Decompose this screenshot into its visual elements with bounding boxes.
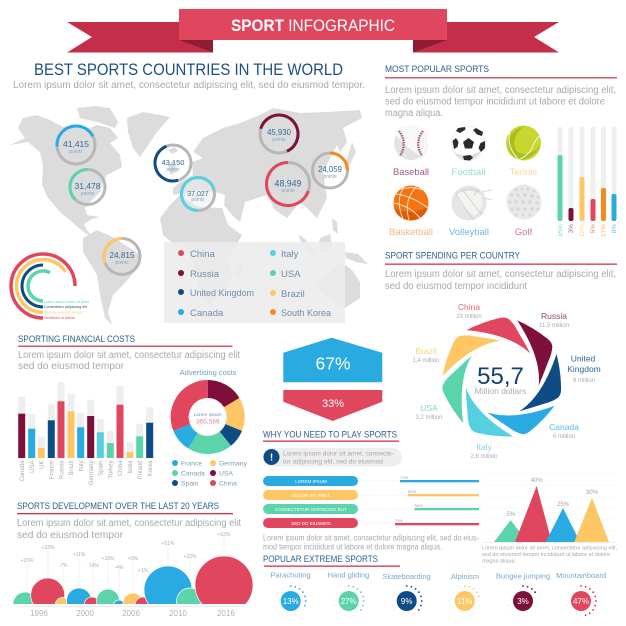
pinwheel chart: spending: 55,7: [477, 363, 524, 390]
bar chart: financial costs: France: [50, 460, 56, 479]
bubble chart: development: -4%: [115, 565, 124, 571]
radial bar chart: Consectetur adipiscing elit: [44, 305, 87, 309]
donut chart: advertising costs: [168, 368, 247, 456]
pinwheel labels: Brazil: [415, 346, 437, 356]
gauge: hand gliding: 27%: [341, 597, 357, 606]
pinwheel labels: 6 million: [553, 434, 575, 440]
gauge: bungee jumping: 3%: [517, 597, 529, 606]
section: popular extreme sports: [263, 554, 606, 616]
bar chart: financial costs: Canada: [20, 460, 26, 482]
icon: volleyball: [452, 186, 492, 220]
bubble chart: development: [13, 532, 253, 618]
map marker: Brazil: points: [115, 260, 129, 266]
map marker: South Korea: points: [323, 174, 337, 180]
gauge: skateboarding: 9%: [401, 597, 412, 606]
bar chart: sports share: 5%: [590, 224, 597, 233]
bar chart: sports share: 3%: [568, 224, 575, 233]
text block: triangle caption: Lorem ipsum dolor sit amet, consectetur adipiscing elit,: [482, 546, 617, 552]
pinwheel labels: 1,4 million: [412, 358, 440, 364]
33% hexagon: 33%: [322, 398, 344, 410]
map marker: Russia: points: [272, 137, 286, 143]
progress rows: CONSECTETUR ADIPISCING ELIT: [275, 507, 347, 512]
bar chart: financial costs: Germany: [89, 460, 95, 485]
heading: SPORTING FINANCIAL COSTS: [18, 334, 135, 344]
bubble chart: development: +1%: [138, 568, 149, 574]
icon: golf ball: [506, 184, 542, 220]
gauge: mountainboard: Mountainboard: [556, 571, 606, 580]
map marker: USA: 31,478: [74, 181, 101, 191]
map marker: Russia: [255, 110, 303, 158]
bubble chart: development: 1996: [30, 609, 48, 618]
text block: triangle caption: magna aliqua.: [482, 558, 516, 564]
donut legend: France: [181, 460, 202, 468]
bar chart: sports share: [558, 127, 618, 237]
text block: triangle caption: sed do eiusmod tempor incididunt ut labore et dolore: [482, 552, 610, 558]
bar chart: financial costs: [18, 382, 154, 485]
legend panel: countries: United Kingdom: [190, 288, 254, 299]
section: sport spending per country: [385, 250, 617, 292]
legend panel: countries: [164, 242, 345, 323]
text block: Lorem ipsum dolor sit amet, consectetur adipiscing elit: [17, 518, 241, 529]
bubble chart: development: 2006: [122, 609, 140, 618]
title ribbon: [67, 9, 559, 52]
progress rows: DOLOR SIT AMET: [292, 493, 330, 498]
pinwheel labels: Italy: [476, 442, 493, 452]
pinwheel labels: USA: [420, 403, 438, 413]
callout: tur adipiscing elit, sed do eiusmod: [283, 458, 383, 466]
bar chart: financial costs: China: [118, 460, 124, 476]
map marker: China: 48,949: [275, 178, 302, 188]
legend panel: countries: China: [190, 249, 216, 260]
gauge: alpinism: Alpinism: [451, 572, 479, 581]
bubble chart: development: +11%: [73, 552, 86, 558]
map marker: Brazil: [99, 233, 145, 280]
map marker: UK: points: [166, 167, 180, 173]
pinwheel chart: spending: Million dollars: [475, 386, 526, 396]
progress rows: 56%: [414, 503, 423, 508]
triangle chart: 25%: [557, 502, 570, 508]
map marker: South Korea: [312, 153, 348, 188]
heading: SPORTS DEVELOPMENT OVER THE LAST 20 YEARS: [17, 501, 219, 511]
bubble chart: development: +3%: [128, 556, 139, 562]
map marker: China: points: [281, 188, 295, 194]
legend panel: countries: USA: [281, 269, 301, 280]
title ribbon: SPORT INFOGRAPHIC: [231, 17, 395, 35]
legend panel: countries: Italy: [281, 249, 299, 260]
section: why you need to play sports: [263, 430, 402, 466]
gauge: alpinism: [450, 572, 480, 616]
map marker: Canada: points: [69, 149, 83, 155]
pinwheel labels: 23 million: [456, 314, 482, 320]
bar chart: sports share: 45%: [558, 224, 564, 237]
triangle chart: 5%: [506, 512, 516, 518]
gauge: bungee jumping: [496, 572, 550, 616]
map marker: Canada: 41,415: [63, 139, 89, 149]
map marker: China: [261, 157, 315, 211]
pinwheel labels: Kingdom: [567, 364, 601, 374]
text block: why sports: Lorem ipsum dolor sit amet, consectetur adipiscing elit, sed do eius-: [263, 534, 479, 542]
callout: !: [270, 452, 273, 464]
text block: why sports: mod tempor incididunt ut labore et dolore magna aliqua.: [263, 542, 442, 552]
bar chart: financial costs: Italy: [79, 460, 85, 472]
legend panel: countries: Brazil: [281, 289, 305, 300]
map marker: Russia: 45,930: [267, 128, 292, 137]
section: sports development: [17, 501, 241, 541]
gauge: alpinism: 11%: [457, 597, 472, 606]
bubble chart: development: -7%: [59, 563, 68, 569]
sport labels: Golf: [515, 227, 533, 238]
donut legend: China: [219, 480, 237, 488]
donut legend: Canada: [181, 470, 205, 478]
text block: sed do eiusmod tempor incididunt ut labore et dolore: [385, 96, 605, 108]
donut chart: advertising costs: Lorem ipsum: [194, 412, 222, 418]
progress rows: SED DO EIUSMOD: [291, 521, 331, 526]
pinwheel labels: 11,5 million: [539, 323, 569, 329]
legend panel: countries: Canada: [190, 308, 224, 319]
gauge: mountainboard: [556, 571, 606, 616]
progress rows: LOREM IPSUM: [295, 479, 327, 484]
donut legend: [172, 460, 248, 488]
bubble chart: development: 2016: [217, 609, 235, 618]
progress rows: 65%: [408, 489, 416, 494]
bubble chart: development: -14%: [87, 563, 99, 569]
pinwheel labels: 3,2 million: [415, 415, 443, 421]
pinwheel labels: United: [571, 354, 596, 364]
progress rows: [263, 475, 479, 528]
bubble chart: development: 2000: [76, 609, 94, 618]
pinwheel labels: [412, 302, 601, 460]
icon: football: [452, 126, 486, 160]
bar chart: financial costs: Spain: [98, 460, 104, 476]
icon: baseball: [394, 126, 428, 160]
33% hexagon: [283, 390, 382, 421]
bar chart: financial costs: India: [128, 460, 134, 474]
bubble chart: development: 2010: [169, 609, 187, 618]
radial bar chart: Sed do eiusmod tempor: [44, 310, 84, 314]
map marker: Italy: points: [191, 197, 205, 203]
map marker: Brazil: 24,815: [109, 251, 135, 260]
text block: sed do eiusmod tempor: [18, 361, 125, 372]
gauge: hand gliding: Hand gliding: [328, 570, 369, 580]
map marker: USA: points: [81, 191, 95, 197]
bar chart: financial costs: Russia: [60, 460, 66, 479]
bar chart: financial costs: Brazil: [69, 460, 75, 476]
67% hexagon: [283, 338, 382, 382]
progress rows: 72%: [400, 475, 408, 480]
map marker: Italy: [182, 178, 214, 210]
bar chart: financial costs: USA: [30, 460, 36, 473]
text block: magna aliqua.: [385, 108, 443, 119]
donut chart: advertising costs: 365,589: [196, 418, 220, 426]
pinwheel labels: 8 million: [573, 378, 595, 384]
pinwheel labels: Russia: [541, 311, 567, 321]
callout: Lorem ipsum dolor sit amet, consecte-: [283, 450, 394, 458]
sport labels: Football: [452, 167, 486, 178]
gauge: parachuting: Parachuting: [270, 570, 311, 580]
heading: POPULAR EXTREME SPORTS: [263, 554, 378, 564]
donut legend: USA: [219, 470, 233, 478]
gauge: mountainboard: 47%: [573, 597, 589, 606]
triangle chart: 30%: [586, 490, 599, 496]
bar chart: financial costs: Turkey: [108, 460, 114, 479]
text block: sed do eiusmod tempor incididunt: [385, 281, 527, 292]
heading: MOST POPULAR SPORTS: [385, 64, 489, 74]
gauge: bungee jumping: Bungee jumping: [496, 572, 550, 580]
map marker: Italy: 37,027: [187, 191, 209, 198]
heading: SPORT SPENDING PER COUNTRY: [385, 250, 520, 260]
section: sporting financial costs: [18, 334, 240, 372]
map marker: UK: 43,150: [162, 158, 184, 167]
bar chart: financial costs: UK: [40, 460, 46, 469]
text: map subtitle: Lorem ipsum dolor sit amet, consectetur adipiscing elit, sed do eiusmod tempor.: [13, 80, 365, 91]
map marker: Canada: [55, 124, 97, 166]
text block: sed do eiusmod tempor: [17, 530, 124, 541]
pinwheel labels: Canada: [549, 422, 579, 432]
sport labels: Volleyball: [449, 227, 489, 238]
map marker: UK: [151, 141, 195, 185]
radial bar chart: Lorem ipsum dolor sit amet: [44, 300, 89, 304]
bubble chart: development: +51%: [162, 541, 175, 547]
section: most popular sports: [385, 64, 617, 119]
donut legend: Spain: [181, 480, 199, 488]
radial bar chart: [11, 254, 89, 320]
bubble chart: development: +22%: [184, 554, 197, 560]
pinwheel labels: China: [458, 302, 480, 312]
heading: WHY YOU NEED TO PLAY SPORTS: [263, 430, 397, 440]
legend panel: countries: Russia: [190, 269, 220, 280]
bar chart: financial costs: Poland: [138, 460, 144, 479]
text block: Lorem ipsum dolor sit amet, consectetur adipiscing elit,: [385, 85, 616, 96]
callout: [263, 448, 402, 466]
text block: Lorem ipsum dolor sit amet, consectetur adipiscing elit: [18, 350, 240, 361]
radial bar chart: Incididunt ut labore: [44, 316, 75, 320]
67% hexagon: 67%: [315, 354, 351, 374]
bar chart: sports share: 8%: [611, 224, 618, 233]
pinwheel labels: 2,6 million: [470, 454, 498, 460]
text block: Lorem ipsum dolor sit amet, consectetur adipiscing elit,: [385, 269, 616, 280]
icon: tennis ball: [506, 126, 541, 160]
progress rows: 75%: [395, 518, 403, 523]
bar chart: sports share: 22%: [579, 224, 586, 237]
icon: basketball: [394, 186, 428, 220]
sport labels: [389, 167, 537, 238]
gauge: skateboarding: [382, 572, 431, 616]
legend panel: countries: South Korea: [281, 308, 332, 319]
bar chart: sports share: 17%: [600, 224, 608, 237]
gauge: skateboarding: Skateboarding: [382, 572, 431, 581]
gauge: hand gliding: [328, 570, 369, 616]
world map: [10, 106, 368, 325]
triangle chart: [484, 474, 616, 543]
sport labels: Basketball: [389, 227, 433, 238]
map marker: USA: [63, 162, 112, 212]
sport labels: Baseball: [393, 167, 429, 178]
map marker: South Korea: 24,059: [318, 165, 342, 174]
triangle chart: 40%: [531, 478, 543, 484]
bubble chart: development: +15%: [21, 558, 34, 564]
gauge: parachuting: 13%: [283, 597, 299, 606]
bubble chart: development: +32%: [42, 545, 55, 551]
bubble chart: development: +18%: [102, 556, 115, 562]
donut legend: Germany: [219, 460, 248, 468]
sport labels: Tennis: [510, 167, 537, 178]
pinwheel chart: spending: [430, 310, 570, 450]
bar chart: financial costs: Korea: [148, 460, 154, 477]
heading: best sports countries: BEST SPORTS COUNTRIES IN THE WORLD: [34, 61, 343, 79]
donut chart: advertising costs: Advertising costs: [180, 368, 237, 377]
bubble chart: development: +63%: [218, 532, 231, 538]
gauge: parachuting: [270, 570, 311, 616]
